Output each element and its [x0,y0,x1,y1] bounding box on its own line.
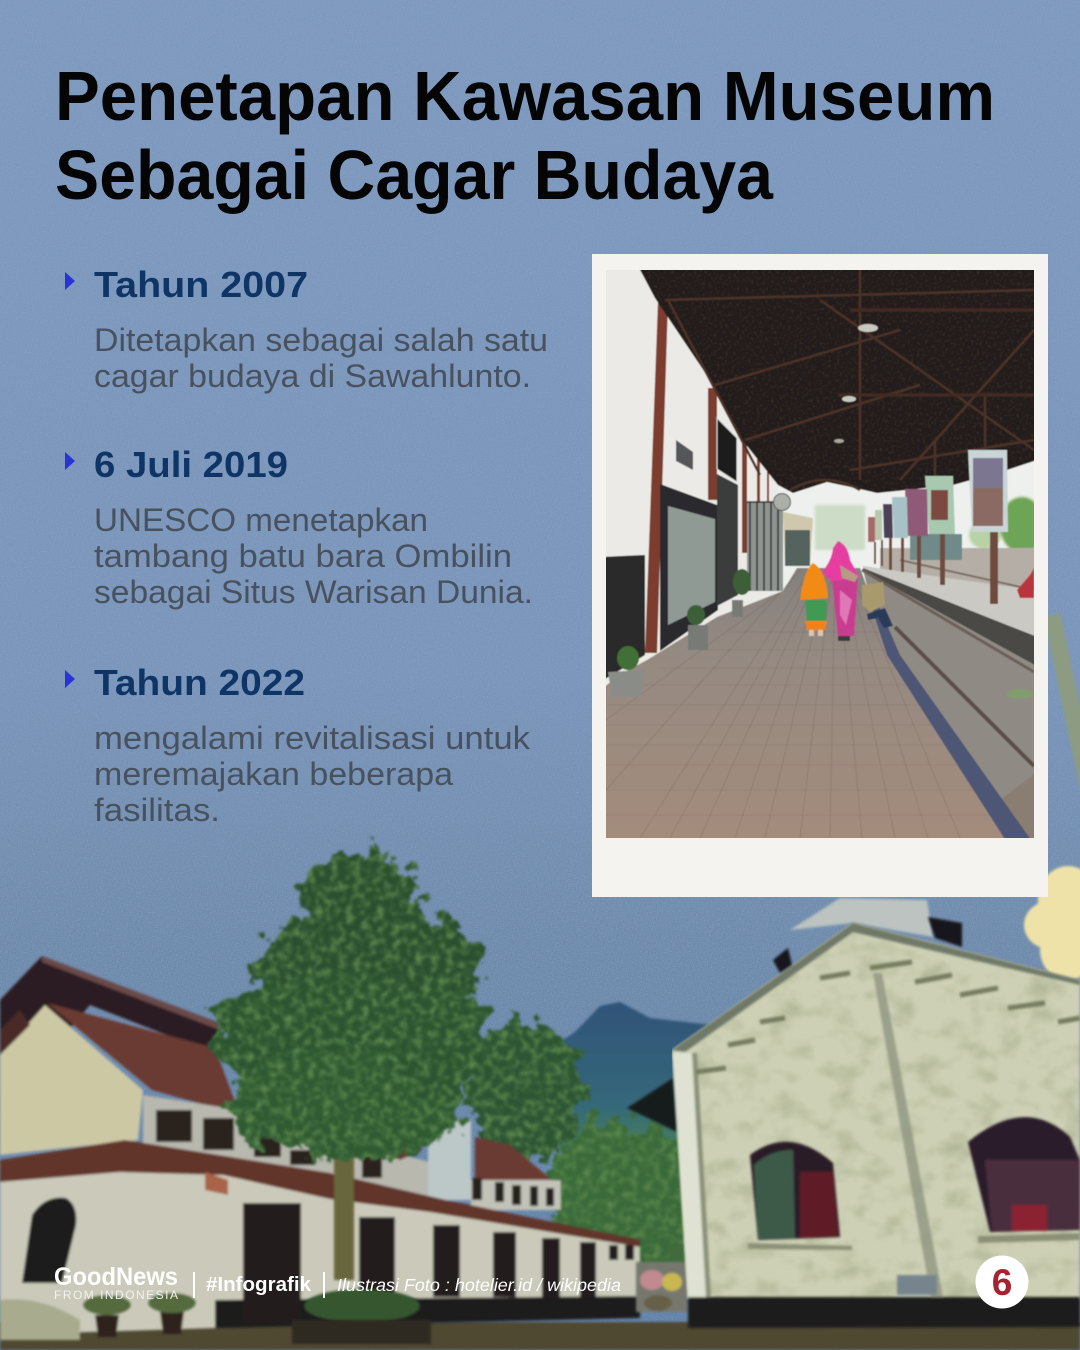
description text: sebagai Situs Warisan Dunia. [94,574,533,610]
icon: bullet triangle [65,272,75,290]
heading: Tahun 2022: Tahun 2022 [94,662,305,703]
description text: tambang batu bara Ombilin [94,538,512,574]
timeline item: 6 Juli 2019 [65,444,533,610]
gable wall [672,923,1080,1300]
roof tower [790,898,933,937]
description text [94,502,533,610]
far building [783,512,813,566]
GoodNews logo: GoodNews [54,1263,178,1291]
icon: bullet triangle [65,670,75,688]
ground [0,1322,1080,1350]
description text [94,322,548,394]
page number badge [976,1256,1028,1308]
GoodNews logo: FROM INDONESIA [54,1288,178,1302]
description text: meremajakan beberapa [94,756,453,792]
timeline item: Tahun 2022 [65,662,531,828]
display case [660,484,718,651]
page number badge: 6 [992,1262,1012,1303]
poles [874,532,998,604]
potted plants [608,569,751,697]
seated person [862,582,885,612]
clock [774,494,790,510]
footer credit bar [54,1263,621,1302]
station wall [606,302,814,680]
photo card: Sawahlunto station platform [592,254,1048,897]
sign board [717,418,737,482]
photo credit: Ilustrasi Foto : hotelier.id / wikipedia [337,1275,621,1295]
description text: Ditetapkan sebagai salah satu [94,322,548,358]
heading: 6 Juli 2019: 6 Juli 2019 [94,444,288,485]
flowering shrub [636,1262,688,1312]
description text: fasilitas. [94,792,220,828]
gate [747,502,783,591]
front shrub and planter [292,1289,431,1344]
child [800,563,828,600]
cloud [1024,866,1080,980]
icon: bullet triangle [65,452,75,470]
column [645,301,668,653]
motorbike [1017,568,1034,598]
description text: UNESCO menetapkan [94,502,428,538]
blue platform edge [872,608,1030,838]
tree canopy and trunk [210,852,488,1280]
bushes behind the building [545,1120,695,1270]
hashtag: #Infografik [206,1274,312,1296]
description text: cagar budaya di Sawahlunto. [94,358,531,394]
heading: Tahun 2007: Tahun 2007 [94,264,308,305]
title: Penetapan Kawasan Museum [55,57,995,135]
platform floor [600,568,1016,844]
palm tree [467,1018,583,1162]
polaroid frame [592,254,1048,897]
doorway [717,474,738,606]
banners [868,450,1008,542]
right building [627,898,1080,1328]
photo [600,264,1044,844]
pole at right of frame [1052,615,1080,785]
GoodNews logo [54,1263,178,1302]
vent [676,440,693,470]
timeline item: Tahun 2007 [65,264,548,394]
far platform and tracks [863,534,1040,668]
lamps [858,324,878,332]
background scene: colonial buildings and tree [0,615,1080,1350]
mother [822,541,860,582]
description text: mengalami revitalisasi untuk [94,720,531,756]
title: Sebagai Cagar Budaya [55,136,774,214]
title [55,57,995,214]
roof canopy [637,264,1040,493]
description text [94,720,531,828]
people walking [800,541,893,641]
left building [0,956,640,1340]
mountain [540,1002,712,1150]
track gravel and rails [862,570,1040,844]
distant trees [815,497,1044,553]
